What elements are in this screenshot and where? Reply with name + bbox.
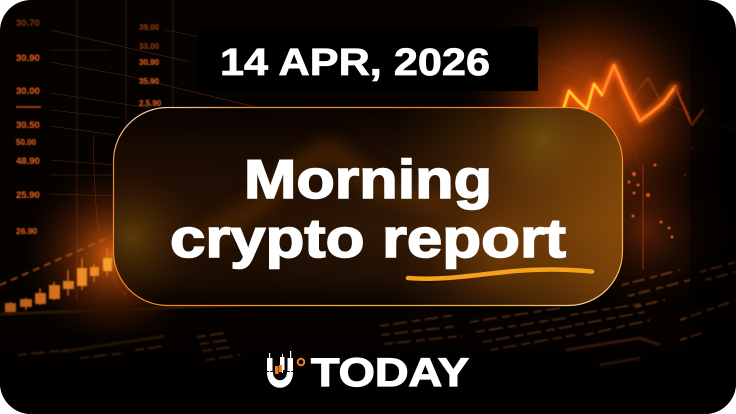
left price axis labels: 30.00 bbox=[16, 86, 40, 97]
price grid lines bbox=[50, 0, 736, 300]
left price axis labels bbox=[16, 18, 162, 236]
candlestick chart bbox=[0, 237, 112, 315]
left price axis labels: 30.90 bbox=[139, 58, 160, 67]
icon: orange ring bbox=[298, 359, 304, 365]
icon: U with candlesticks bbox=[267, 351, 293, 388]
left price axis labels: 48.90 bbox=[16, 156, 40, 167]
trading desk keyboard bbox=[0, 262, 736, 365]
left price axis labels: 26.90 bbox=[16, 226, 38, 236]
left price axis labels: 2.5.90 bbox=[139, 99, 162, 108]
left price axis labels: 35.90 bbox=[139, 77, 160, 86]
orange underline bbox=[408, 270, 592, 279]
left price axis labels: 30.90 bbox=[16, 53, 40, 64]
left price axis labels: 39.00 bbox=[139, 23, 160, 32]
logo: U.Today bbox=[267, 351, 469, 395]
wordmark: TODAY bbox=[311, 351, 469, 395]
heading line 2: crypto report bbox=[170, 207, 566, 269]
right vertical red line bbox=[642, 165, 644, 270]
heading line 1: Morning bbox=[244, 148, 492, 210]
glowing price line bbox=[564, 65, 703, 125]
left price axis labels: 33.00 bbox=[139, 42, 160, 51]
left price axis labels: 30.50 bbox=[16, 120, 40, 131]
date box bbox=[198, 27, 538, 91]
left price axis labels: 30.70 bbox=[16, 18, 40, 29]
date box: 14 APR, 2026 bbox=[220, 42, 490, 84]
left price axis labels: 25.90 bbox=[16, 190, 40, 201]
blurred chart ghost bbox=[200, 150, 450, 240]
left price axis labels: 50.00 bbox=[16, 138, 37, 147]
glowing data dots bbox=[628, 147, 693, 238]
small axis tick bbox=[16, 106, 41, 108]
panel: headline bbox=[114, 108, 622, 306]
